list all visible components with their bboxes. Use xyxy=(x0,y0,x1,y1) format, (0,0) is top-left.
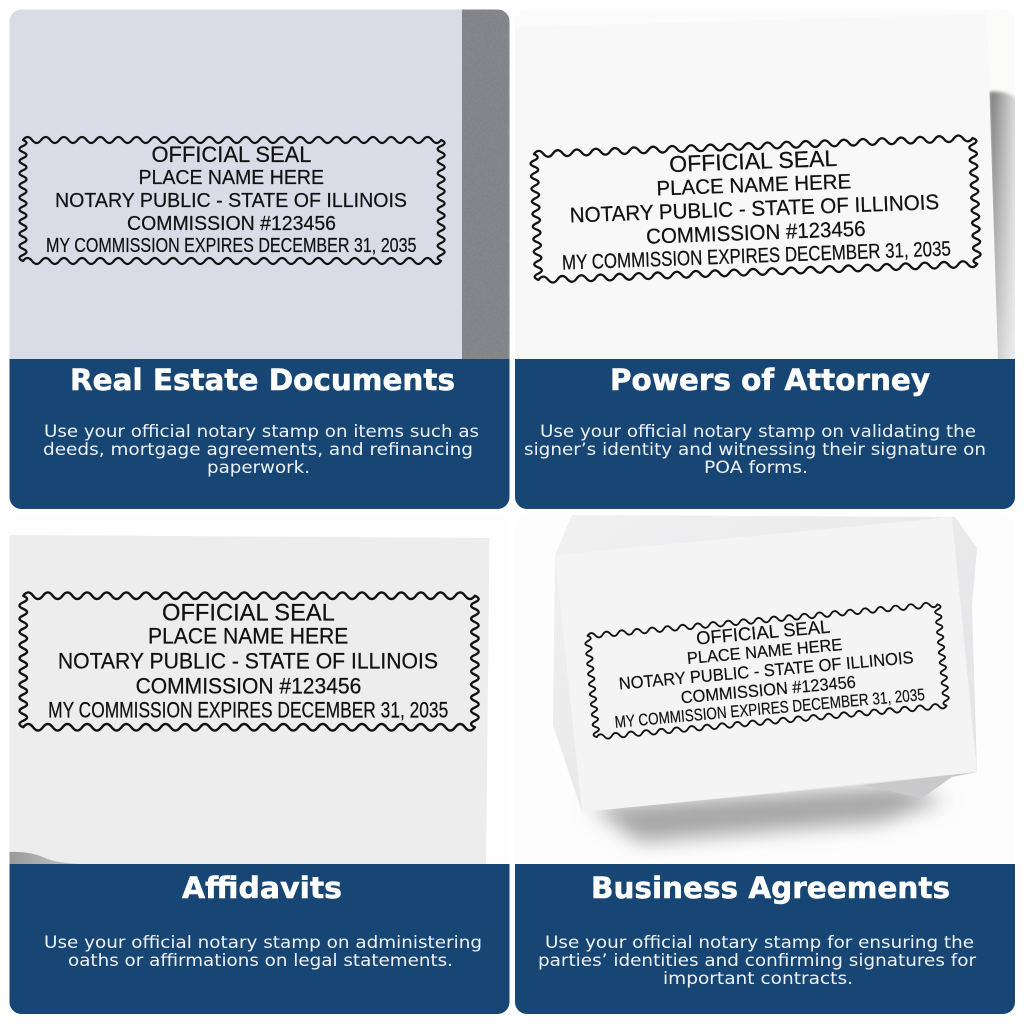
caption panel: affidavits: oaths or affirmations on legal statements. xyxy=(68,951,453,971)
caption panel: real estate documents: Real Estate Documents xyxy=(70,363,455,397)
caption panel: real estate documents: Use your official notary stamp on items such as xyxy=(44,422,479,442)
caption panel: affidavits xyxy=(10,864,510,1014)
stamp impression: official seal: OFFICIAL SEAL xyxy=(162,600,335,627)
caption panel: affidavits: Use your official notary stamp on administering xyxy=(44,933,482,953)
caption panel: powers of attorney: Powers of Attorney xyxy=(610,363,930,397)
stamp impression: official seal xyxy=(584,602,950,740)
caption panel: business agreements: Business Agreements xyxy=(591,871,950,905)
stamp impression: official seal: COMMISSION #123456 xyxy=(680,672,857,707)
stamp impression: official seal: OFFICIAL SEAL xyxy=(152,142,312,167)
caption panel: business agreements: important contracts. xyxy=(663,969,853,989)
stamp impression: official seal: PLACE NAME HERE xyxy=(686,635,843,668)
stamp impression: official seal: COMMISSION #123456 xyxy=(136,674,361,699)
caption panel: powers of attorney: signer’s identity and witnessing their signature on xyxy=(524,440,986,460)
caption panel: affidavits: Affidavits xyxy=(182,871,342,905)
caption panel: powers of attorney: POA forms. xyxy=(704,458,808,478)
stamp impression: official seal: COMMISSION #123456 xyxy=(646,217,866,249)
panel: powers of attorney xyxy=(515,88,1015,509)
stamp impression: official seal: NOTARY PUBLIC - STATE OF ILLINOIS xyxy=(58,649,438,674)
panel: real estate documents xyxy=(10,10,510,509)
stamp impression: official seal: MY COMMISSION EXPIRES DECEMBER 31, 2035 xyxy=(614,685,926,732)
stamp impression: official seal: OFFICIAL SEAL xyxy=(669,145,838,177)
stamp impression: official seal: PLACE NAME HERE xyxy=(148,624,348,649)
stamp impression: official seal: NOTARY PUBLIC - STATE OF ILLINOIS xyxy=(55,189,407,212)
photo: stamped lavender paper on stone surface xyxy=(10,10,510,360)
caption panel: real estate documents: paperwork. xyxy=(207,458,310,478)
stamp impression: official seal: NOTARY PUBLIC - STATE OF ILLINOIS xyxy=(569,190,940,228)
panel: affidavits xyxy=(10,514,510,1014)
caption panel: real estate documents xyxy=(10,359,510,509)
stamp impression: official seal: OFFICIAL SEAL xyxy=(695,616,831,649)
stamp impression: official seal: NOTARY PUBLIC - STATE OF ILLINOIS xyxy=(618,647,914,694)
photo: white paper sheet with shadow xyxy=(989,88,1015,359)
photo: stack of white cards with shadow xyxy=(553,515,977,855)
photo: grey paper sheet with torn corner xyxy=(10,514,510,865)
caption panel: business agreements xyxy=(515,864,1015,1014)
caption panel: business agreements: parties’ identities and confirming signatures for xyxy=(538,951,976,971)
stamp impression: official seal: COMMISSION #123456 xyxy=(127,212,336,235)
stamp impression: official seal xyxy=(530,135,981,283)
stamp impression: official seal: MY COMMISSION EXPIRES DECEMBER 31, 2035 xyxy=(46,235,416,257)
stamp impression: official seal: PLACE NAME HERE xyxy=(656,170,852,200)
stamp impression: official seal xyxy=(20,137,445,264)
panel: business agreements xyxy=(515,514,1015,1014)
stamp impression: official seal xyxy=(20,592,479,731)
caption panel: powers of attorney xyxy=(515,359,1015,509)
stamp impression: official seal: PLACE NAME HERE xyxy=(138,167,324,189)
caption panel: real estate documents: deeds, mortgage agreements, and refinancing xyxy=(43,440,473,460)
caption panel: powers of attorney: Use your official notary stamp on validating the xyxy=(540,422,976,442)
stamp impression: official seal: MY COMMISSION EXPIRES DECEMBER 31, 2035 xyxy=(48,697,448,722)
caption panel: business agreements: Use your official notary stamp for ensuring the xyxy=(545,933,974,953)
